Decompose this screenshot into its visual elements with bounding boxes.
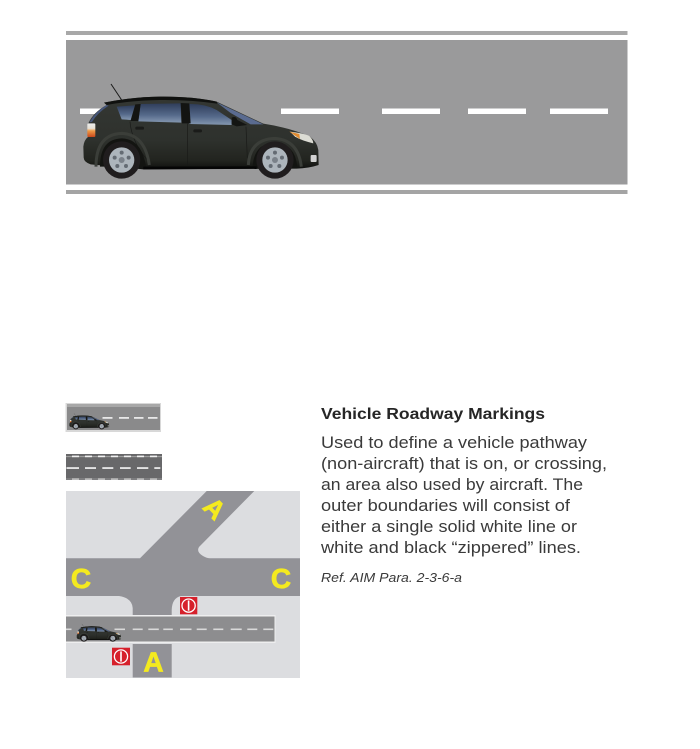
taxiway labels xyxy=(71,491,291,678)
reference note: Ref. AIM Para. 2-3-6-a xyxy=(321,570,462,585)
airport intersection diagram xyxy=(66,491,300,678)
black car, large xyxy=(83,84,319,179)
description text: either a single solid white line or xyxy=(321,517,577,536)
description text xyxy=(320,433,607,557)
small car on crossing xyxy=(77,624,121,642)
description text: Used to define a vehicle pathway xyxy=(321,433,588,452)
main road illustration xyxy=(66,31,628,194)
taxiway labels: A xyxy=(197,491,232,526)
icon: runway holding sign lower xyxy=(112,648,130,665)
description text: white and black “zippered” lines. xyxy=(320,538,581,557)
small car xyxy=(69,413,109,429)
heading: Vehicle Roadway Markings xyxy=(321,406,545,423)
description text: outer boundaries will consist of xyxy=(321,496,570,515)
thumbnail: solid line roadway xyxy=(66,403,161,432)
vehicle roadway crossing xyxy=(66,615,276,643)
description text: an area also used by aircraft. The xyxy=(321,475,583,494)
taxiway labels: C xyxy=(71,563,91,594)
taxiway labels: A xyxy=(143,646,164,678)
taxiway pavement xyxy=(66,491,300,617)
road centre dashes xyxy=(80,108,608,114)
description text: (non-aircraft) that is on, or crossing, xyxy=(321,454,607,473)
thumbnail: zippered line roadway xyxy=(66,454,162,480)
icon: runway holding sign upper xyxy=(180,597,197,614)
taxiway labels: C xyxy=(271,563,291,594)
